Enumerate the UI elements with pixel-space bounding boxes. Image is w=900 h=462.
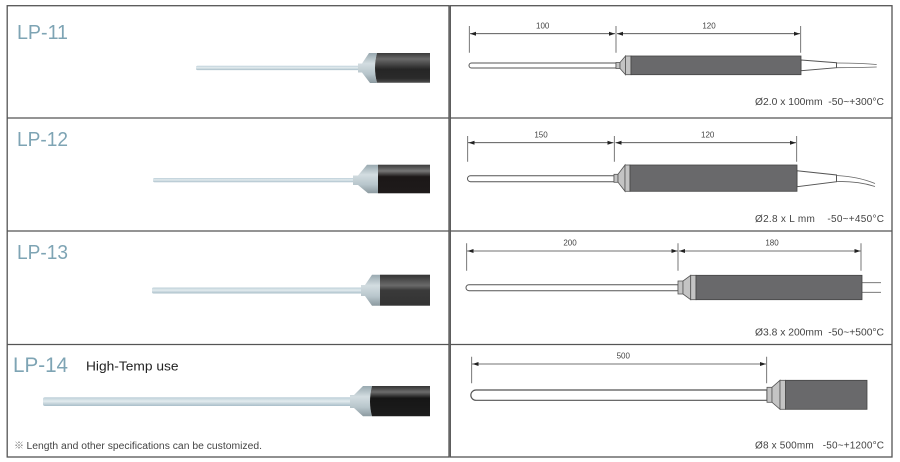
panel: LP-13 dimension drawing [466, 238, 884, 339]
dimension lines 150 and 120 [468, 130, 797, 162]
panel: LP-11 dimension drawing [469, 22, 884, 108]
dimension lines 100 and 120 [469, 22, 801, 53]
dimension lines 150 and 120: 120 [701, 130, 715, 140]
panel: LP-12 photo [17, 129, 430, 193]
panel: LP-13 photo [17, 242, 430, 306]
probe drawing LP-12 [468, 165, 875, 191]
High-Temp use label: High-Temp use [86, 358, 178, 374]
model name LP-14: LP-14 [13, 354, 68, 377]
spec LP-14: Ø8 x 500mm -50~+1200°C [755, 441, 884, 452]
spec LP-13: Ø3.8 x 200mm -50~+500°C [755, 328, 884, 339]
customization note: Length and other specifications can be customized. [26, 441, 262, 452]
panel: LP-14 photo [13, 354, 430, 452]
probe drawing LP-11 [469, 56, 877, 75]
dimension lines 200 and 180: 200 [563, 238, 577, 248]
spec LP-11: Ø2.0 x 100mm -50~+300°C [755, 97, 884, 108]
spec LP-12: Ø2.8 x L mm -50~+450°C [755, 214, 884, 225]
customization note: ※ [14, 441, 24, 452]
probe drawing LP-14 [471, 380, 867, 409]
model name LP-12: LP-12 [17, 129, 68, 151]
panel: LP-14 dimension drawing [471, 352, 884, 452]
dimension line 500: 500 [617, 352, 631, 361]
table frame: right column [450, 6, 892, 457]
probe photo LP-12 [153, 165, 430, 193]
panel: LP-12 dimension drawing [468, 130, 884, 225]
dimension lines 200 and 180: 180 [765, 238, 779, 248]
table frame: left column [7, 6, 449, 457]
dimension lines 150 and 120: 150 [534, 130, 548, 140]
probe drawing LP-13 [466, 275, 881, 300]
probe photo LP-11 [196, 53, 430, 83]
dimension lines 100 and 120: 100 [536, 22, 550, 30]
probe photo LP-14 [43, 386, 430, 416]
dimension line 500 [472, 352, 767, 383]
panel: LP-11 photo [17, 22, 430, 83]
dimension lines 100 and 120: 120 [702, 22, 716, 30]
model name LP-13: LP-13 [17, 242, 68, 264]
model name LP-11: LP-11 [17, 22, 68, 44]
dimension lines 200 and 180 [467, 238, 861, 271]
probe photo LP-13 [152, 275, 430, 306]
